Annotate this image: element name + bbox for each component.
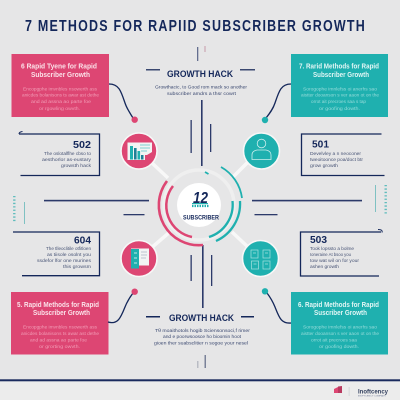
panel: top left pink card: and ad assna ao parte foe	[31, 99, 92, 104]
info box 502: growsth hack	[61, 163, 92, 168]
hub label: SUBSCRIBER	[183, 214, 219, 222]
heading: bottom growth hack: GROWTH HACK	[169, 313, 234, 324]
panel: top left pink card: anicdes bolanisons ts awar ast dethe	[22, 92, 100, 98]
panel: bottom right teal card: Suscriber Growth	[314, 310, 367, 317]
right dotted accent	[375, 185, 386, 215]
heading: bottom growth hack	[146, 313, 254, 324]
info box 503: tow wat wil on for your	[310, 258, 360, 263]
footer logo text: INOFTCENCY COMPANY	[358, 394, 387, 398]
spokes	[150, 162, 249, 249]
panel: top right teal card	[291, 54, 388, 117]
info box 503: ashen growth	[310, 264, 340, 269]
panel: bottom right teal card: 6. Rapid Methods for Rapid	[298, 302, 379, 309]
icon: chart circle	[121, 133, 157, 169]
info box 501: Develvley a n neoconer	[310, 151, 362, 156]
icon: files circle	[242, 240, 278, 276]
panel: top left pink card: Subscriber Growth	[31, 72, 90, 79]
text block: bottom growth hack	[154, 328, 250, 346]
panel: top left pink card: 6 Rapid Tyene for Rapid	[21, 64, 97, 70]
text block: top growth hack	[155, 84, 248, 96]
text block: bottom growth hack: gioen ther suabsclitier n sogoe your nesel	[154, 340, 248, 346]
panel: bottom left pink card: Subscriber Growth	[33, 310, 90, 317]
panel: bottom left pink card: anicdes bolanisons ts awar ast dethe	[21, 331, 100, 336]
info box 502: The oslotalflhe cbso to	[44, 151, 92, 156]
heading: top growth hack	[146, 69, 255, 80]
panel: bottom right teal card	[291, 292, 388, 354]
panel: top right teal card: aistter dooanson s ver aaon ot on the	[301, 92, 380, 98]
hub icon: 12	[193, 190, 208, 207]
footer rule	[0, 379, 400, 381]
panel: bottom right teal card: or goofing dowth.	[319, 344, 359, 349]
info box 502: 502	[73, 140, 91, 151]
hub pink arcs	[159, 181, 203, 245]
info box 604: this growsm	[63, 264, 91, 269]
panel: bottom left pink card: 5. Rapid Methods for Rapid	[17, 302, 99, 309]
panel: bottom right teal card: Sorogophe imnlefss oi anerhs sao	[303, 324, 378, 330]
panel: bottom left pink card: or grorting owvth.	[39, 344, 80, 349]
heading: top growth hack: GROWTH HACK	[167, 69, 233, 80]
info box 501: 501	[312, 140, 329, 150]
panel: bottom left pink card: and ad assna ao parte foe	[30, 338, 88, 342]
info box 604	[13, 232, 100, 276]
info box 503: Took lopssto a bolme	[310, 246, 355, 251]
center axis lines	[44, 46, 362, 368]
info box 604: as tiisole osolnt you	[47, 252, 92, 257]
panel: top right teal card: or goofing dowth.	[319, 106, 360, 111]
panel: bottom left pink card: Encopgphe imvnbles nsowerth ass	[23, 324, 97, 330]
connector: bottom left	[108, 288, 138, 323]
panel: bottom right teal card: aistter dooanson s ver aaon ot on the	[301, 331, 380, 336]
icon: document circle	[121, 240, 157, 276]
text block: top growth hack: subscriber amdrs a thsr cowrt	[167, 91, 237, 96]
info box 604: The tlleoclitile otfitloen	[46, 246, 92, 251]
panel: top right teal card: orrot ait precroes saa s tap	[311, 99, 367, 104]
panel: bottom right teal card: orrot ait precroes saa	[311, 338, 358, 342]
panel: top right teal card: Sorogophe imnlefss oi anerhs sao	[303, 86, 378, 92]
footer logo icon	[334, 386, 342, 393]
text block: bottom growth hack: Tθ moaithotols hogib Sciensonsoci,f rimer	[155, 328, 250, 333]
info box 503: Ioneraine At bsoo you	[310, 252, 352, 257]
info box 501: tweoitoonce poa/doct btr	[310, 157, 364, 162]
footer band	[0, 381, 400, 400]
footer divider	[348, 387, 350, 396]
central hub	[159, 167, 242, 245]
panel: top left pink card	[12, 54, 109, 117]
panel: top right teal card: Subscriber Growth	[313, 72, 369, 79]
info box 501	[302, 134, 384, 176]
info box 604: ssdefor lfor one murines	[37, 258, 92, 263]
info box 502: aesthorlor as-eustary	[42, 157, 92, 162]
panel: bottom left pink card	[11, 292, 108, 354]
text block: top growth hack: Growthacic, to Good rom mack so another	[155, 84, 248, 90]
text block: bottom growth hack: and e poorwsoosce ho bioomin hoot	[163, 334, 242, 339]
panel: top left pink card: or rgowling owvth.	[39, 106, 80, 111]
hub teal arcs	[205, 167, 242, 241]
footer logo text: Inoftcency	[358, 388, 388, 396]
info box 501: grow growth	[310, 163, 339, 168]
left dotted accent	[14, 196, 25, 224]
panel: top right teal card: 7. Rarid Methods for Rapid	[299, 64, 379, 70]
info box 502	[19, 132, 100, 176]
icon: person circle	[244, 133, 280, 169]
info box 503: 503	[310, 235, 327, 246]
connector: top left	[109, 84, 138, 123]
info box 503	[300, 230, 382, 276]
panel: top left pink card: Encopgphe imvnbles nsowerth ass	[23, 86, 97, 92]
connector: bottom right	[262, 288, 291, 323]
connector: top right	[262, 84, 291, 123]
info box 604: 604	[74, 236, 91, 246]
